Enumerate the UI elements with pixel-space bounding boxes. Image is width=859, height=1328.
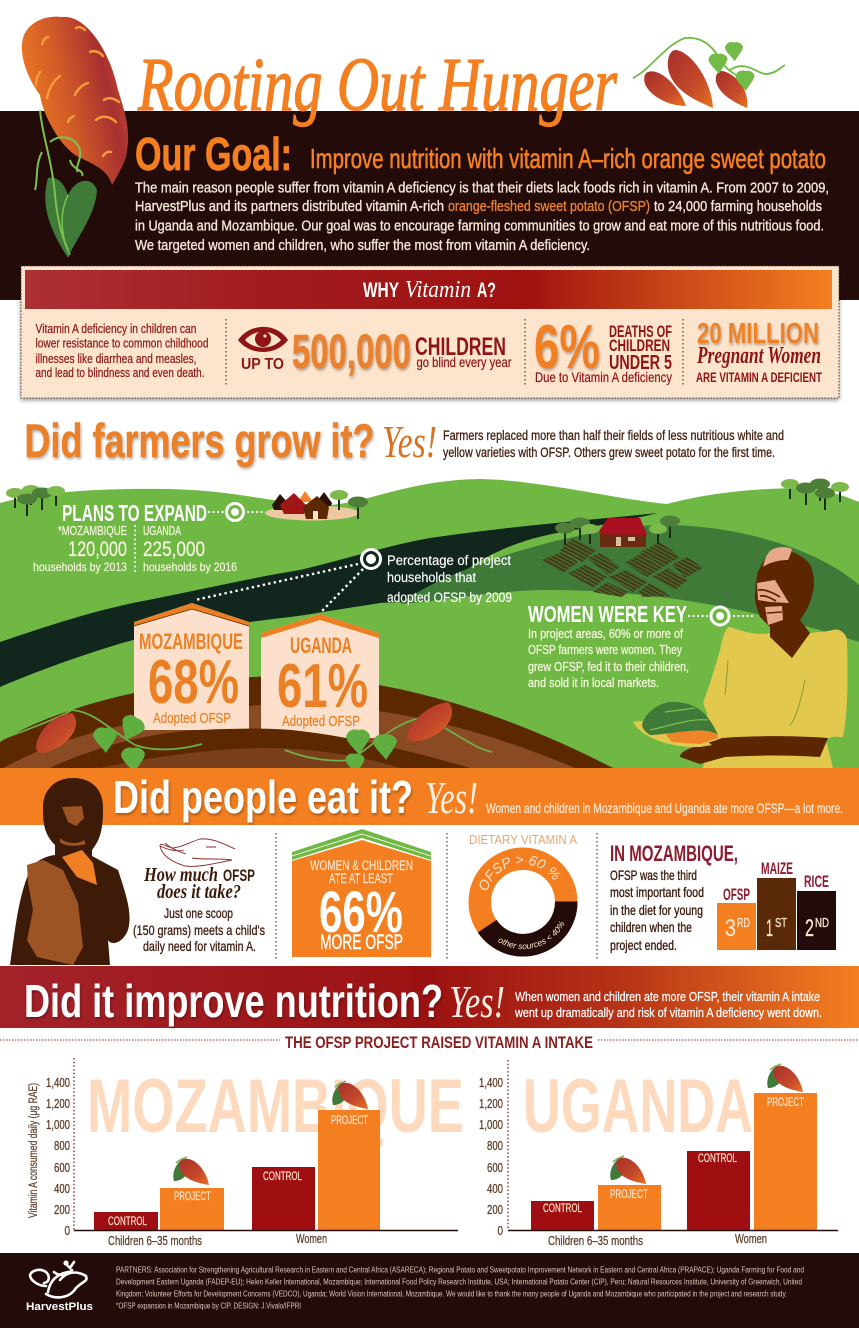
- house: Mozambique 68%: 68%: [148, 648, 239, 717]
- partners text: [116, 1266, 804, 1310]
- callout: percentage of households: [195, 550, 512, 611]
- donut chart: dietary vitamin A: other sources < 40%: [498, 921, 564, 950]
- y axis labels: 600: [54, 1160, 70, 1175]
- sweet potato and vines: right: [285, 702, 492, 774]
- text: in Mozambique: [610, 841, 738, 953]
- text: in Mozambique: IN MOZAMBIQUE,: [610, 841, 738, 866]
- bar chart: food ranking: RD: [737, 915, 750, 930]
- deficiency text: and lead to blindness and even death.: [36, 366, 204, 380]
- text: in Mozambique: OFSP was the third: [610, 867, 697, 883]
- band: did people eat it: [0, 768, 859, 825]
- goal text block: HarvestPlus and its partners distributed vitamin A-rich: [135, 199, 444, 215]
- callout: plans to expand: UGANDA: [143, 523, 181, 538]
- bar labels: PROJECT: [610, 1189, 648, 1201]
- house: Uganda 61%: [261, 614, 379, 738]
- callout: women were key: and sold it in local markets.: [528, 675, 659, 690]
- heading: did farmers grow it: Farmers replaced more than half their fields of less nutritious white and: [443, 428, 784, 443]
- house: 66% more OFSP: MORE OFSP: [320, 931, 403, 954]
- y axis labels: 800: [487, 1138, 503, 1153]
- goal text block: to 24,000 farming households: [654, 199, 822, 215]
- text: how much OFSP: does it take?: [157, 881, 241, 903]
- text: how much OFSP: OFSP: [223, 866, 255, 885]
- icon: eye: [238, 327, 288, 352]
- stat: 6% deaths: UNDER 5: [609, 352, 672, 374]
- text: how much OFSP: [133, 864, 265, 954]
- category labels: Women: [296, 1231, 327, 1246]
- sweet potato and vines: left: [0, 710, 202, 773]
- category labels: [548, 1231, 767, 1248]
- heading: did it improve nutrition: Yes!: [449, 976, 505, 1027]
- text: in Mozambique: children when the: [610, 919, 692, 935]
- bar labels: PROJECT: [174, 1191, 211, 1203]
- goal heading: [135, 128, 826, 180]
- donut chart: dietary vitamin A: OFSP > 60 %: [480, 856, 561, 890]
- text: in Mozambique: project ended.: [610, 937, 677, 953]
- icon: three sweet potatoes on vine: [633, 38, 785, 108]
- y axis labels: 1,000: [479, 1117, 503, 1132]
- panel header bar: [25, 270, 832, 309]
- heading: did it improve nutrition: Did it improve nutrition?: [24, 975, 443, 1027]
- house: Uganda 61%: UGANDA: [290, 633, 352, 658]
- heading: did it improve nutrition: [24, 975, 822, 1027]
- house: 66% more OFSP: 66%: [319, 880, 403, 945]
- donut chart: dietary vitamin A: DIETARY VITAMIN A: [469, 832, 577, 847]
- bar chart: food ranking: OFSP: [723, 885, 750, 904]
- heading: did farmers grow it: Yes!: [382, 416, 437, 467]
- text: how much OFSP: How much: [143, 864, 218, 886]
- heading: did farmers grow it: yellow varieties with OFSP. Others grew sweet potato for the first time.: [443, 445, 775, 460]
- y axis title: Vitamin A consumed daily (μg RAE): [28, 1083, 40, 1218]
- goal text block: [135, 180, 829, 254]
- heading: did farmers grow it: [24, 414, 784, 467]
- bars: [531, 1093, 817, 1230]
- panel heading: [363, 277, 496, 303]
- bar labels: [543, 1097, 804, 1215]
- stat: 500,000 children: CHILDREN: [415, 333, 506, 361]
- callout: women were key: grew OFSP, fed it to their children,: [528, 659, 689, 674]
- stat: 6% deaths: DEATHS OF: [609, 323, 672, 341]
- callout: women were key: OFSP farmers were women. They: [528, 642, 682, 657]
- house: 66% more OFSP: [292, 829, 431, 957]
- bars: [94, 1110, 380, 1230]
- heading: did people eat it: Did people eat it?: [113, 771, 413, 823]
- y axis labels: 1,200: [479, 1096, 503, 1111]
- child illustration: [10, 778, 130, 965]
- house: Uganda 61%: Adopted OFSP: [282, 713, 360, 730]
- callout: percentage of households: Percentage of project: [387, 553, 511, 568]
- house: 66% more OFSP: WOMEN & CHILDREN: [310, 857, 413, 873]
- stat: 6% deaths: Due to Vitamin A deficiency: [535, 369, 672, 385]
- footer band: [0, 1253, 859, 1328]
- stat: 6% deaths: 6%: [534, 313, 600, 382]
- bar chart: food ranking: RICE: [804, 872, 829, 891]
- donut chart: dietary vitamin A: [468, 832, 578, 956]
- callout: women were key: [528, 601, 754, 690]
- goal text block: We targeted women and children, who suffer the most from vitamin A deficiency.: [135, 238, 590, 254]
- y axis labels: 800: [54, 1138, 70, 1153]
- partners text: *OFSP expansion in Mozambique by CIP. DESIGN: J.Vivalo/IFPRI: [116, 1302, 301, 1310]
- deficiency text: lower resistance to common childhood: [36, 336, 209, 350]
- stat: 500,000 children: 500,000: [292, 326, 411, 379]
- y axis labels: 600: [487, 1160, 503, 1175]
- bar labels: CONTROL: [543, 1203, 582, 1215]
- icon: large sweet potato with vine and leaf: [22, 17, 128, 258]
- farm: [542, 516, 703, 597]
- text: how much OFSP: Just one scoop: [164, 905, 233, 921]
- y axis labels: [479, 1075, 503, 1238]
- y axis labels: 400: [487, 1181, 503, 1196]
- stat: 500,000 children: [241, 326, 512, 379]
- watermark: Mozambique: MOZAMBIQUE: [87, 1064, 464, 1149]
- house: 66% more OFSP: ATE AT LEAST: [329, 870, 393, 886]
- landscape: hills: [0, 479, 859, 768]
- y axis labels: 0: [498, 1223, 503, 1238]
- y axis labels: 200: [54, 1202, 70, 1217]
- bar labels: PROJECT: [767, 1097, 804, 1109]
- stat: 20 million: [696, 318, 822, 385]
- deficiency text: [36, 322, 209, 380]
- callout: plans to expand: 225,000: [143, 538, 205, 561]
- logo: HarvestPlus: [26, 1260, 93, 1313]
- callout: plans to expand: *MOZAMBIQUE: [58, 523, 127, 538]
- y axis labels: 200: [487, 1202, 503, 1217]
- chart section title: THE OFSP PROJECT RAISED VITAMIN A INTAKE: [285, 1033, 593, 1052]
- goal text block: orange-fleshed sweet potato (OFSP): [448, 199, 650, 215]
- y axis labels: 1,400: [479, 1075, 503, 1090]
- heading: did farmers grow it: Did farmers grow it?: [24, 414, 374, 467]
- heading: did people eat it: [113, 771, 843, 823]
- deficiency text: Vitamin A deficiency in children can: [36, 322, 197, 336]
- callout: women were key: WOMEN WERE KEY: [528, 601, 687, 627]
- deficiency text: illnesses like diarrhea and measles,: [36, 352, 196, 366]
- category labels: Children 6–35 months: [548, 1233, 643, 1248]
- callout: plans to expand: 120,000: [68, 538, 127, 561]
- bar labels: PROJECT: [331, 1115, 368, 1127]
- bar labels: CONTROL: [698, 1153, 737, 1165]
- house: Mozambique 68%: [134, 603, 249, 730]
- woman illustration: [633, 547, 848, 768]
- trees: left group: [6, 485, 65, 516]
- stat: 6% deaths: [534, 313, 672, 385]
- category labels: [108, 1231, 327, 1248]
- bar chart: Mozambique: [28, 1058, 464, 1248]
- y axis labels: 1,200: [46, 1096, 70, 1111]
- callout: plans to expand: [33, 500, 263, 574]
- stat: 20 million: 20 MILLION: [697, 318, 819, 350]
- house: Uganda 61%: 61%: [277, 652, 368, 721]
- bar chart: food ranking: ND: [815, 915, 829, 930]
- stat: 6% deaths: CHILDREN: [609, 337, 670, 355]
- panel: why vitamin A: [21, 266, 839, 398]
- landscape: dark road: [0, 513, 658, 687]
- panel heading: WHY: [363, 279, 399, 302]
- village: [265, 490, 368, 520]
- header band: [0, 111, 859, 300]
- category labels: Children 6–35 months: [108, 1233, 202, 1248]
- soil arc over houses: [50, 729, 470, 768]
- panel heading: Vitamin: [405, 277, 471, 303]
- bar chart: Uganda: [479, 1060, 838, 1248]
- stat: 500,000 children: go blind every year: [416, 354, 512, 370]
- text: how much OFSP: (150 grams) meets a child's: [133, 922, 265, 938]
- text: in Mozambique: in the diet for young: [610, 902, 703, 918]
- landscape: soil: [0, 676, 613, 770]
- watermark: Uganda: UGANDA: [523, 1064, 753, 1149]
- logo: HarvestPlus: HarvestPlus: [26, 1301, 93, 1313]
- house: Mozambique 68%: Adopted OFSP: [153, 710, 231, 727]
- bar labels: CONTROL: [108, 1216, 147, 1228]
- y axis labels: 400: [54, 1181, 70, 1196]
- bar labels: [108, 1115, 368, 1228]
- callout: plans to expand: households by 2016: [143, 560, 237, 574]
- heading: did people eat it: Yes!: [425, 772, 478, 823]
- callout: percentage of households: adopted OFSP by 2009: [387, 590, 512, 605]
- title: Rooting Out Hunger: [137, 43, 617, 127]
- bar chart: food ranking: 1: [766, 915, 773, 942]
- text: how much OFSP: daily need for vitamin A.: [143, 938, 256, 954]
- callout: women were key: In project areas, 60% or more of: [528, 626, 683, 641]
- callout: plans to expand: PLANS TO EXPAND: [62, 500, 207, 526]
- callout: plans to expand: households by 2013: [33, 560, 127, 574]
- category labels: Women: [735, 1231, 767, 1246]
- trees: right group: [781, 478, 849, 510]
- text: in Mozambique: most important food: [610, 884, 704, 900]
- bar chart: food ranking: [717, 859, 836, 950]
- y axis labels: [46, 1075, 70, 1238]
- icon: cupped hand: [160, 839, 235, 866]
- bar chart: food ranking: 3: [725, 915, 736, 942]
- band: did it improve nutrition: [0, 966, 859, 1028]
- y axis labels: 1,400: [46, 1075, 70, 1090]
- bar chart: food ranking: 2: [805, 915, 814, 942]
- goal heading: Our Goal:: [135, 128, 292, 180]
- stat: 500,000 children: UP TO: [241, 356, 284, 373]
- house: Mozambique 68%: MOZAMBIQUE: [139, 629, 243, 654]
- callout: percentage of households: households that: [387, 570, 476, 585]
- panel heading: A?: [477, 279, 496, 302]
- bar chart: food ranking: ST: [775, 915, 787, 930]
- y axis labels: 1,000: [46, 1117, 70, 1132]
- y axis labels: 0: [64, 1223, 70, 1238]
- bar chart: food ranking: MAIZE: [761, 859, 793, 878]
- bar labels: CONTROL: [263, 1171, 302, 1183]
- landscape: far hill: [400, 525, 859, 642]
